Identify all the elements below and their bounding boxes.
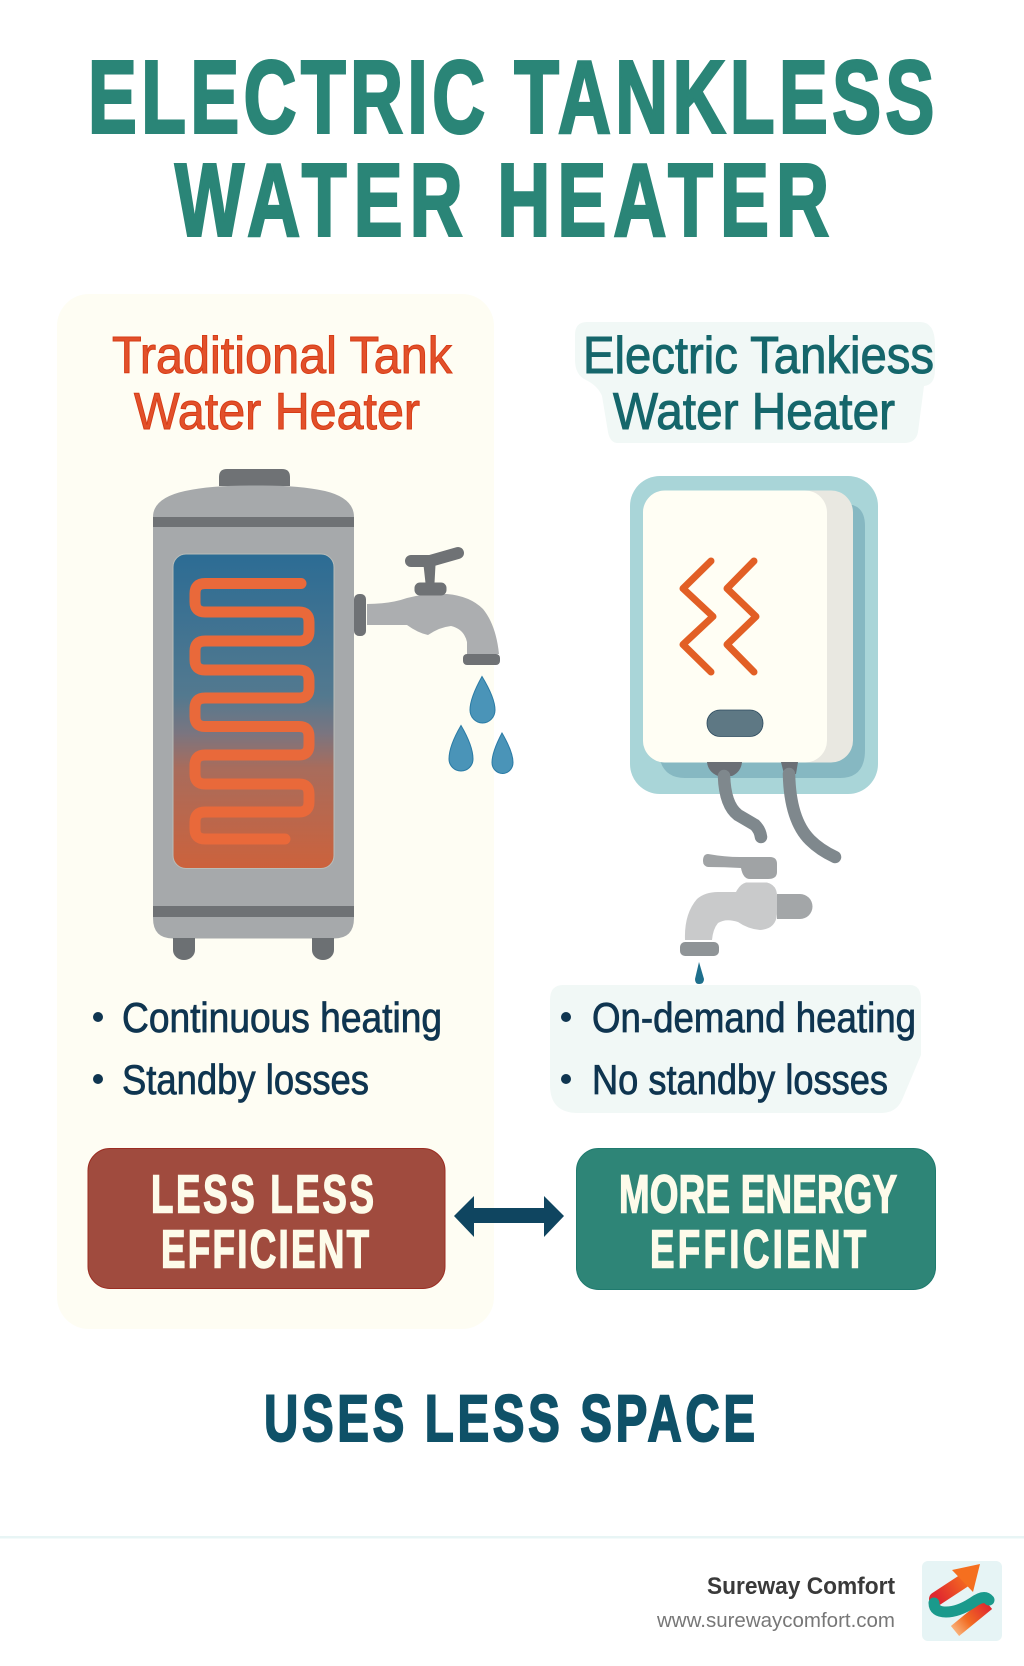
bullets: tankless: [550, 985, 921, 1113]
faucet body: [685, 882, 777, 940]
title: [88, 39, 934, 257]
bullets: tankless: On-demand heating: [592, 994, 916, 1041]
water drop: [695, 962, 704, 984]
tank bands: [153, 517, 354, 917]
heading: electric tankless: Water Heater: [613, 383, 895, 441]
tagline: USES LESS SPACE: [264, 1382, 755, 1456]
faucet nozzle: [680, 942, 719, 956]
faucet handle: [703, 854, 777, 879]
unit shadow: [660, 504, 865, 778]
illustration: electric tankless unit: [630, 476, 878, 857]
tank top cap: [219, 469, 290, 486]
faucet nozzle: [463, 654, 500, 665]
brand name: Sureway Comfort: [707, 1573, 895, 1600]
callout: more energy efficient: MORE ENERGY: [619, 1163, 897, 1224]
bullets: traditional tank: Continuous heating: [122, 994, 442, 1041]
illustration: tank faucet: [354, 553, 513, 774]
water drops: [449, 676, 513, 774]
bullets: tankless: No standby losses: [592, 1056, 888, 1103]
bullets: traditional tank: [93, 994, 442, 1103]
heading: traditional tank: Water Heater: [134, 383, 420, 441]
faucet stub: [777, 894, 812, 919]
footer brand: [656, 1573, 895, 1632]
brand url: www.surewaycomfort.com: [656, 1610, 895, 1632]
faucet spout: [367, 594, 499, 654]
arrow: comparison: [454, 1196, 564, 1237]
callout: more energy efficient: [576, 1148, 936, 1290]
heading: traditional tank: [112, 327, 453, 441]
heading: electric tankless: [575, 322, 935, 443]
faucet flange: [354, 594, 366, 636]
panel: traditional tank background: [57, 294, 494, 1329]
bullets: traditional tank: Standby losses: [122, 1056, 369, 1103]
heating coil: [195, 584, 309, 839]
callout: more energy efficient: EFFICIENT: [650, 1218, 866, 1279]
indicator pill: [707, 710, 763, 736]
heading: traditional tank: Traditional Tank: [112, 327, 453, 385]
tank shell: [153, 486, 354, 938]
unit front panel: [643, 490, 827, 762]
heat zigzag icon: [683, 561, 756, 672]
callout: less efficient: EFFICIENT: [161, 1218, 369, 1279]
unit side strip: [643, 490, 853, 762]
callout: less efficient: [88, 1148, 445, 1288]
heading: electric tankless: Electric Tankiess: [583, 327, 934, 385]
illustration: tankless faucet: [680, 854, 812, 984]
title: ELECTRIC TANKLESS: [88, 39, 934, 154]
illustration: storage tank: [153, 469, 354, 960]
callout: less efficient: LESS LESS: [151, 1163, 374, 1224]
title: WATER HEATER: [175, 142, 829, 257]
pipe connectors: [707, 762, 798, 776]
tank feet: [173, 938, 334, 960]
pipes: [724, 774, 835, 857]
faucet valve: [411, 553, 458, 595]
tank water window: [173, 554, 334, 868]
unit wall plate: [630, 476, 878, 794]
logo: [922, 1561, 1002, 1641]
